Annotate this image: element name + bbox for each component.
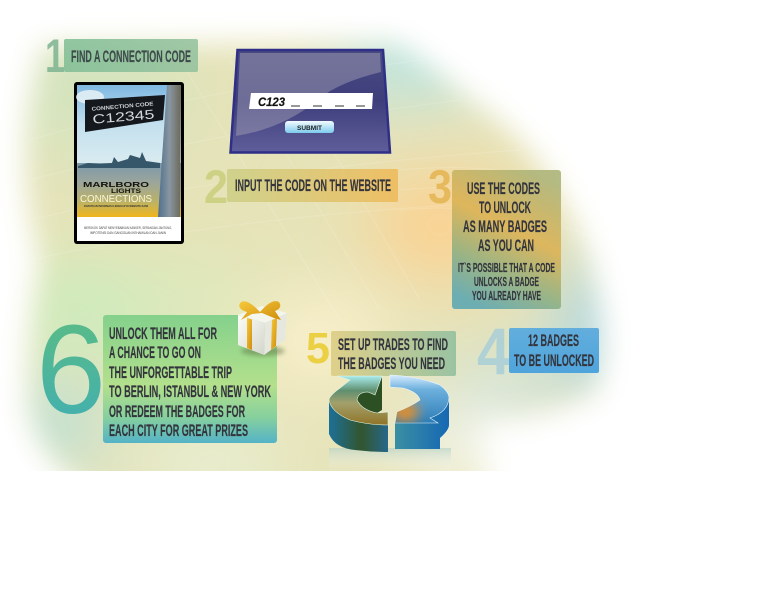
form panel: [230, 50, 390, 152]
left arrow inner wall: [357, 376, 382, 413]
poster skyline: [78, 152, 160, 168]
line: THE UNFORGETTABLE TRIP: [109, 364, 232, 382]
left arrow top: [329, 376, 388, 425]
poster lights: LIGHTS: [111, 189, 141, 195]
sign code: C12345: [92, 106, 155, 127]
step 6 text: [109, 325, 271, 440]
label 4: [509, 328, 599, 373]
number 5: 5: [306, 324, 330, 373]
heading 2: INPUT THE CODE ON THE WEBSITE: [235, 177, 391, 195]
number 2: 2: [204, 160, 228, 213]
step 3: [428, 160, 561, 309]
step 4 line 1: 12 BADGES: [528, 332, 579, 350]
line: A CHANCE TO GO ON: [109, 344, 201, 362]
heading 1: FIND A CONNECTION CODE: [71, 48, 191, 66]
line: AS MANY BADGES: [463, 218, 547, 236]
form gloss: [236, 53, 381, 136]
line: USE THE CODES: [467, 180, 540, 198]
poster note: DAPATKAN INFORMASI LENGKAP DI WEBSITE KAMI: [84, 204, 148, 208]
icon: trade cycle arrows: [329, 375, 451, 472]
right arrow side: [395, 398, 449, 449]
label 1: [64, 39, 198, 72]
sign text: [91, 101, 155, 127]
line: UNLOCK THEM ALL FOR: [109, 325, 217, 343]
code blanks: [291, 105, 365, 107]
number 4: 4: [477, 314, 510, 388]
poster: [74, 82, 184, 244]
submit button: [285, 121, 334, 133]
submit label: SUBMIT: [297, 125, 322, 132]
code input: [249, 93, 373, 109]
gift ribbon right: [271, 318, 277, 350]
line: OR REDEEM THE BADGES FOR: [109, 403, 245, 421]
step 2: [204, 160, 398, 213]
gift bow: [239, 301, 281, 320]
step 6: [36, 299, 277, 443]
website form: [230, 50, 390, 152]
number 6: 6: [36, 299, 106, 440]
number 1: 1: [45, 29, 65, 82]
poster sign: [85, 95, 165, 132]
label 6: [103, 315, 277, 443]
number 3: 3: [428, 160, 452, 213]
step 3 text: [458, 180, 555, 303]
line: TO BERLIN, ISTANBUL & NEW YORK: [109, 383, 271, 401]
reflection: [329, 448, 451, 472]
poster warning 2: IMPOTENSI DAN GANGGUAN KEHAMILAN DAN JANIN: [90, 231, 167, 235]
line: AS YOU CAN: [478, 237, 534, 255]
step 4 line 2: TO BE UNLOCKED: [514, 352, 594, 370]
poster warning 1: MEROKOK DAPAT MENYEBABKAN KANKER, SERANGAN JANTUNG,: [84, 226, 172, 230]
step 5: [306, 324, 456, 376]
label 5: [331, 331, 456, 376]
step 5 line 1: SET UP TRADES TO FIND: [338, 336, 448, 354]
line: TO UNLOCK: [479, 199, 531, 217]
line: EACH CITY FOR GREAT PRIZES: [109, 422, 248, 440]
gift right face: [264, 313, 287, 355]
small line: YOU ALREADY HAVE: [472, 288, 541, 303]
icon: gift box: [238, 301, 287, 356]
typed code: C123: [258, 97, 286, 109]
gift shadow: [241, 346, 285, 356]
sign caption: CONNECTION CODE: [91, 101, 154, 113]
gift left face: [238, 315, 265, 355]
left arrow side: [329, 400, 388, 452]
faint background lines: [30, 60, 600, 320]
gift ribbon left: [247, 318, 252, 350]
label 3: [452, 170, 561, 309]
right arrow warm glow: [391, 402, 419, 422]
poster connections: CONNECTIONS: [80, 194, 152, 205]
poster ground: [77, 163, 181, 217]
gift top face: [238, 306, 287, 323]
right arrow top: [390, 375, 449, 423]
small line: UNLOCKS A BADGE: [474, 274, 539, 289]
step 1: [45, 29, 198, 82]
poster frame: [74, 82, 184, 244]
step 5 line 2: THE BADGES YOU NEED: [338, 355, 445, 373]
step 4: [477, 314, 599, 388]
poster cloud: [76, 90, 104, 104]
poster paper: [77, 85, 181, 241]
poster sky: [77, 85, 181, 163]
white bottom cut: [0, 471, 780, 600]
poster brand: MARLBORO: [83, 180, 149, 189]
small line: IT`S POSSIBLE THAT A CODE: [458, 260, 555, 275]
label 2: [227, 169, 398, 202]
background glow: [10, 27, 618, 471]
poster post: [158, 85, 181, 217]
